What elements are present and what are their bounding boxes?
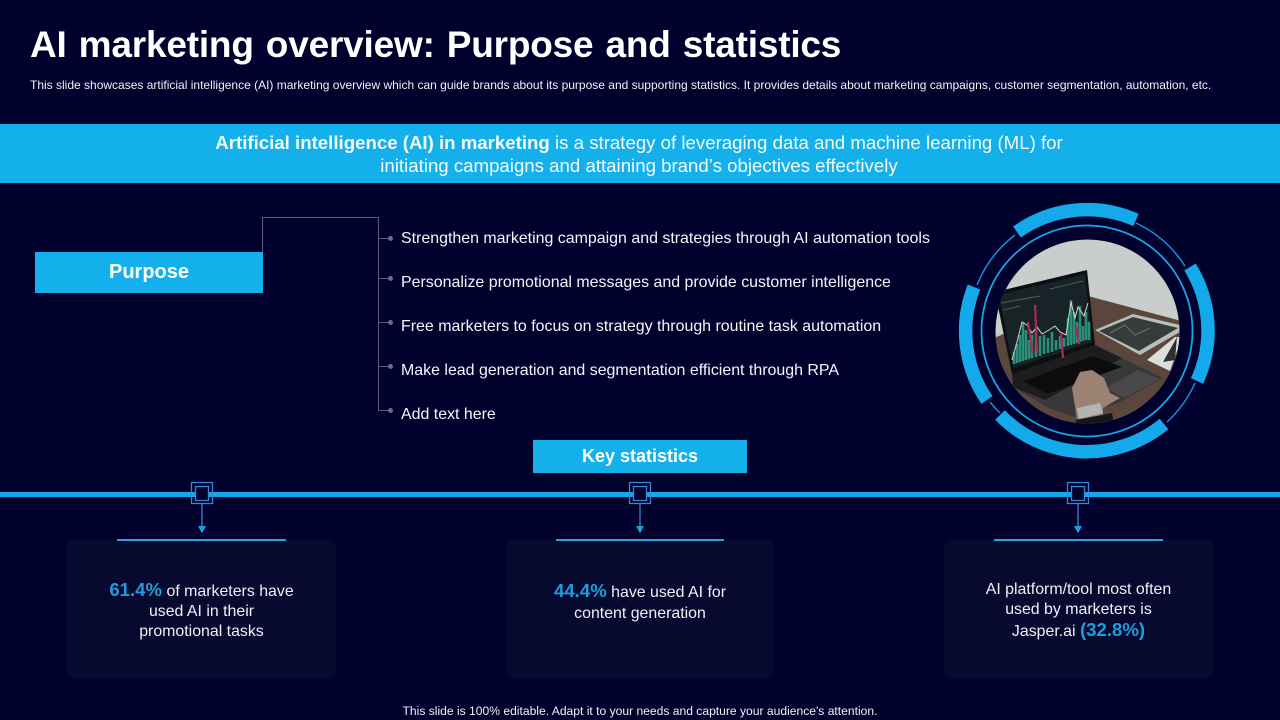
purpose text: Purpose [109, 261, 189, 283]
title: AI marketing overview: Purpose and statistics [30, 24, 841, 65]
subtitle: This slide showcases artificial intelligence (AI) marketing overview which can guide brands about its purpose and supporting statistics. It provides details about marketing campaigns, customer segmentation, automation, etc. [30, 78, 1211, 92]
key statistics label [533, 440, 747, 473]
definition banner [0, 124, 1280, 183]
card 3 accent [994, 539, 1163, 541]
definition text: initiating campaigns and attaining brand’s objectives effectively [380, 155, 898, 176]
statistic card 2 [506, 540, 774, 679]
node 2 [630, 482, 650, 534]
bullet 1: Strengthen marketing campaign and strategies through AI automation tools [401, 230, 930, 247]
circular photo with rings [958, 202, 1215, 458]
card 2 accent [556, 539, 724, 541]
timeline line [0, 492, 1280, 497]
card 1 text: promotional tasks [139, 623, 264, 640]
card 1 accent [117, 539, 286, 541]
key statistics text: Key statistics [582, 446, 698, 466]
definition text: Artificial intelligence (AI) in marketing is a strategy of leveraging data and machine learning (ML) for [215, 132, 1063, 153]
card 3 text [986, 581, 1171, 640]
bullet 2: Personalize promotional messages and provide customer intelligence [401, 274, 891, 291]
card 3 text: Jasper.ai (32.8%) [1012, 619, 1145, 640]
footer note: This slide is 100% editable. Adapt it to your needs and capture your audience's attention. [403, 704, 877, 718]
statistic card 1 [67, 540, 336, 679]
purpose bullet list [401, 230, 930, 423]
definition text [215, 132, 1063, 176]
thick ring arcs [966, 210, 1208, 452]
bullet 5: Add text here [401, 406, 496, 423]
card 2 text: 44.4% have used AI for [554, 580, 726, 601]
card 2 text [554, 580, 726, 622]
card 1 text: 61.4% of marketers have [109, 579, 294, 600]
inner ring [982, 226, 1192, 436]
bullet 4: Make lead generation and segmentation efficient through RPA [401, 362, 839, 379]
card 1 text [109, 579, 294, 640]
laptop photo [996, 240, 1180, 424]
card 3 text: AI platform/tool most often [986, 581, 1171, 598]
card 1 text: used AI in their [149, 603, 254, 620]
card 3 text: used by marketers is [1005, 601, 1152, 618]
thin ring arcs [977, 223, 1195, 422]
bullet 3: Free marketers to focus on strategy through routine task automation [401, 318, 881, 335]
node 3 [1068, 482, 1088, 534]
statistic card 3 [944, 540, 1213, 679]
card 2 text: content generation [574, 605, 706, 622]
node 1 [192, 482, 212, 534]
purpose label [35, 252, 263, 293]
